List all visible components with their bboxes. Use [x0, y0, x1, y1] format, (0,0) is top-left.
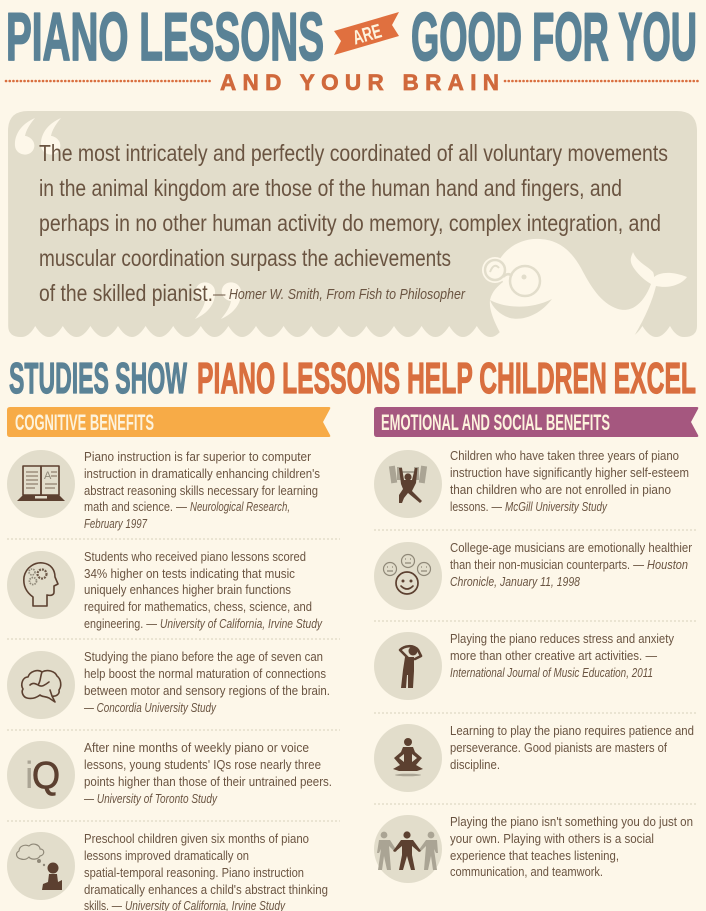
heading: studies show: STUDIES SHOW [9, 354, 187, 403]
text: 34% higher on tests indicating that music [84, 566, 295, 581]
text: Houston [647, 558, 688, 572]
icon: closing quote mark [195, 282, 241, 319]
text: instruction in dramatically enhancing children's [84, 466, 320, 481]
quote text: muscular coordination surpass the achievements [39, 245, 451, 271]
text [84, 449, 320, 531]
text [83, 740, 332, 806]
ribbon heading: cognitive benefits: COGNITIVE BENEFITS [15, 410, 154, 435]
text [84, 831, 328, 911]
title: PIANO LESSONS [6, 0, 324, 75]
text: February 1997 [84, 517, 148, 531]
text: Studying the piano before the age of seven can [84, 649, 323, 664]
benefit: brain maturation [7, 649, 330, 719]
benefit: teamwork [374, 814, 693, 883]
ribbon: are [334, 12, 399, 55]
text [450, 814, 693, 879]
illustration: whale with glasses [482, 239, 687, 338]
text [83, 649, 330, 715]
text: math and science. — [84, 499, 187, 514]
text: than children who are not enrolled in piano [450, 482, 671, 497]
text: lessons, young students' IQs rose nearly three [84, 757, 321, 772]
text: — Concordia University Study [83, 701, 217, 715]
text [450, 723, 694, 772]
icon: laptop with open book [17, 466, 65, 501]
icon: smiling faces [384, 554, 430, 594]
panel: emotional and social benefits [374, 407, 698, 883]
panel: quote [8, 111, 697, 338]
benefit: discipline [374, 723, 694, 792]
text: dramatically enhances a child's abstract thinking [84, 882, 328, 897]
text: between motor and sensory regions of the brain. [84, 683, 330, 698]
icon: laptop with open book: A [44, 470, 52, 482]
quote text: of the skilled pianist. [39, 280, 213, 306]
benefit: reduced stress [374, 631, 674, 700]
text [450, 448, 689, 514]
text: engineering. — [84, 616, 157, 631]
text: discipline. [450, 757, 500, 772]
text: communication, and teamwork. [450, 864, 603, 879]
text: Preschool children given six months of piano [84, 831, 309, 846]
benefit: higher brain functions [7, 549, 323, 631]
text: University of California, Irvine Study [160, 617, 323, 631]
text: spatial-temporal reasoning. Piano instruction [84, 865, 304, 880]
benefit: spatial-temporal reasoning [7, 831, 328, 911]
icon: iQ: i [25, 755, 33, 797]
text: than their non-musician counterparts. — [450, 557, 644, 572]
text: Playing the piano reduces stress and anxiety [450, 631, 674, 646]
text [84, 549, 323, 631]
text: Children who have taken three years of piano [450, 448, 679, 463]
benefit: emotional health [374, 540, 693, 610]
icon: head with gears [24, 563, 58, 606]
text: abstract reasoning skills necessary for learning [84, 483, 318, 498]
benefit: abstract reasoning [7, 449, 320, 531]
text [450, 540, 693, 589]
text: help boost the normal maturation of connections [84, 666, 326, 681]
panel: cognitive benefits [7, 407, 340, 911]
text: Neurological Research, [190, 500, 290, 514]
icon: brain [22, 671, 61, 702]
icon: thinking child [17, 844, 62, 890]
icon: meditating figure [393, 738, 423, 776]
text: — University of Toronto Study [83, 792, 218, 806]
text [450, 631, 674, 680]
icon: iQ: Q [32, 755, 60, 797]
text: uniquely enhances higher brain functions [84, 582, 291, 597]
text: perseverance. Good pianists are masters of [450, 740, 667, 755]
icon: opening quote mark [15, 118, 61, 155]
quote text [39, 140, 668, 306]
benefit: self-esteem [374, 448, 689, 518]
benefit: iq [7, 740, 332, 809]
text: more than other creative art activities. — [450, 648, 657, 663]
subtitle: AND YOUR BRAIN [220, 70, 499, 95]
text: experience that teaches listening, [450, 848, 619, 863]
quote text: — Homer W. Smith, From Fish to Philosopher [212, 287, 466, 303]
text: McGill University Study [505, 500, 608, 514]
text: your own. Playing with others is a social [450, 831, 654, 846]
text: Piano instruction is far superior to computer [84, 449, 312, 464]
icon: weightlifter [389, 466, 427, 503]
text: Chronicle, January 11, 1998 [450, 575, 580, 589]
icon: three people holding hands [377, 831, 438, 870]
text: International Journal of Music Education, 2011 [450, 666, 653, 680]
text: points higher than those of their untrained peers. [84, 774, 332, 789]
icon: stretching figure [400, 646, 421, 688]
ribbon heading: cognitive benefits [7, 407, 330, 437]
ribbon: are: ARE [350, 20, 384, 50]
text: Students who received piano lessons scored [84, 549, 306, 564]
text: required for mathematics, chess, science, and [84, 599, 312, 614]
text: lessons improved dramatically on [84, 848, 249, 863]
text: After nine months of weekly piano or voice [84, 740, 309, 755]
text: lessons. — [450, 499, 502, 514]
